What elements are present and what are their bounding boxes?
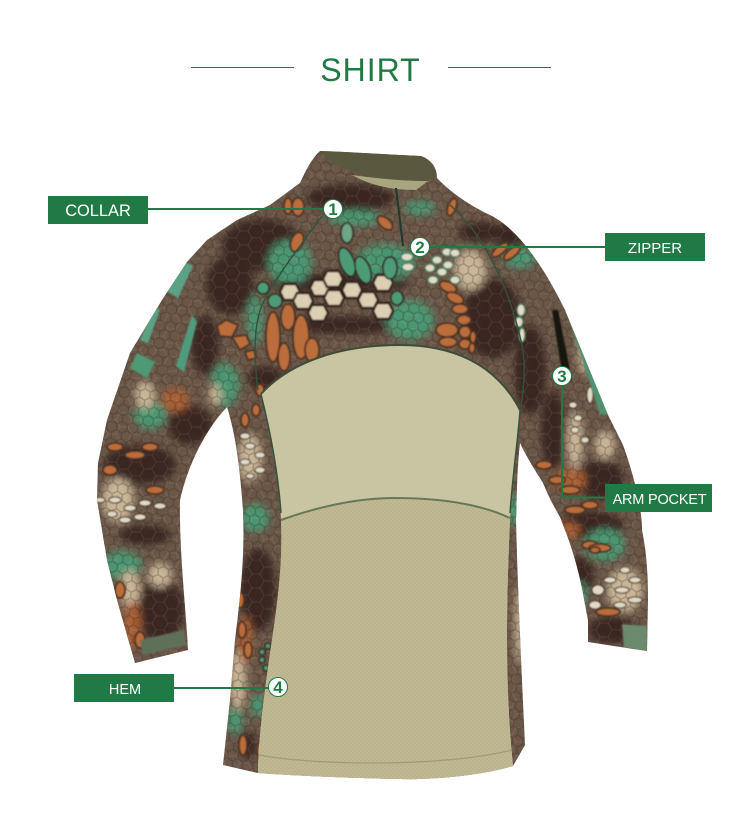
callout 4: hem	[74, 674, 288, 702]
chest and front panel	[258, 345, 520, 779]
callout 2: zipper	[410, 233, 705, 261]
callout 3: arm pocket	[552, 366, 712, 512]
callout 3: arm pocket: ARM POCKET	[613, 492, 707, 508]
callout 1: collar: 1	[328, 200, 338, 219]
callout 1: collar	[48, 196, 342, 224]
scale pattern	[95, 197, 647, 758]
callout 2: zipper: 2	[415, 238, 425, 257]
scale lattice	[90, 150, 660, 790]
title: SHIRT	[320, 52, 421, 88]
camouflage colour patches	[102, 184, 643, 759]
callout 1: collar: COLLAR	[65, 202, 131, 220]
callout 4: hem: HEM	[109, 682, 141, 698]
shirt illustration	[90, 150, 660, 790]
collar lining	[320, 151, 436, 183]
lower mesh panel	[258, 498, 513, 779]
callout 3: arm pocket: 3	[557, 367, 567, 386]
callout 4: hem: 4	[273, 678, 283, 697]
callout 2: zipper: ZIPPER	[628, 240, 682, 257]
